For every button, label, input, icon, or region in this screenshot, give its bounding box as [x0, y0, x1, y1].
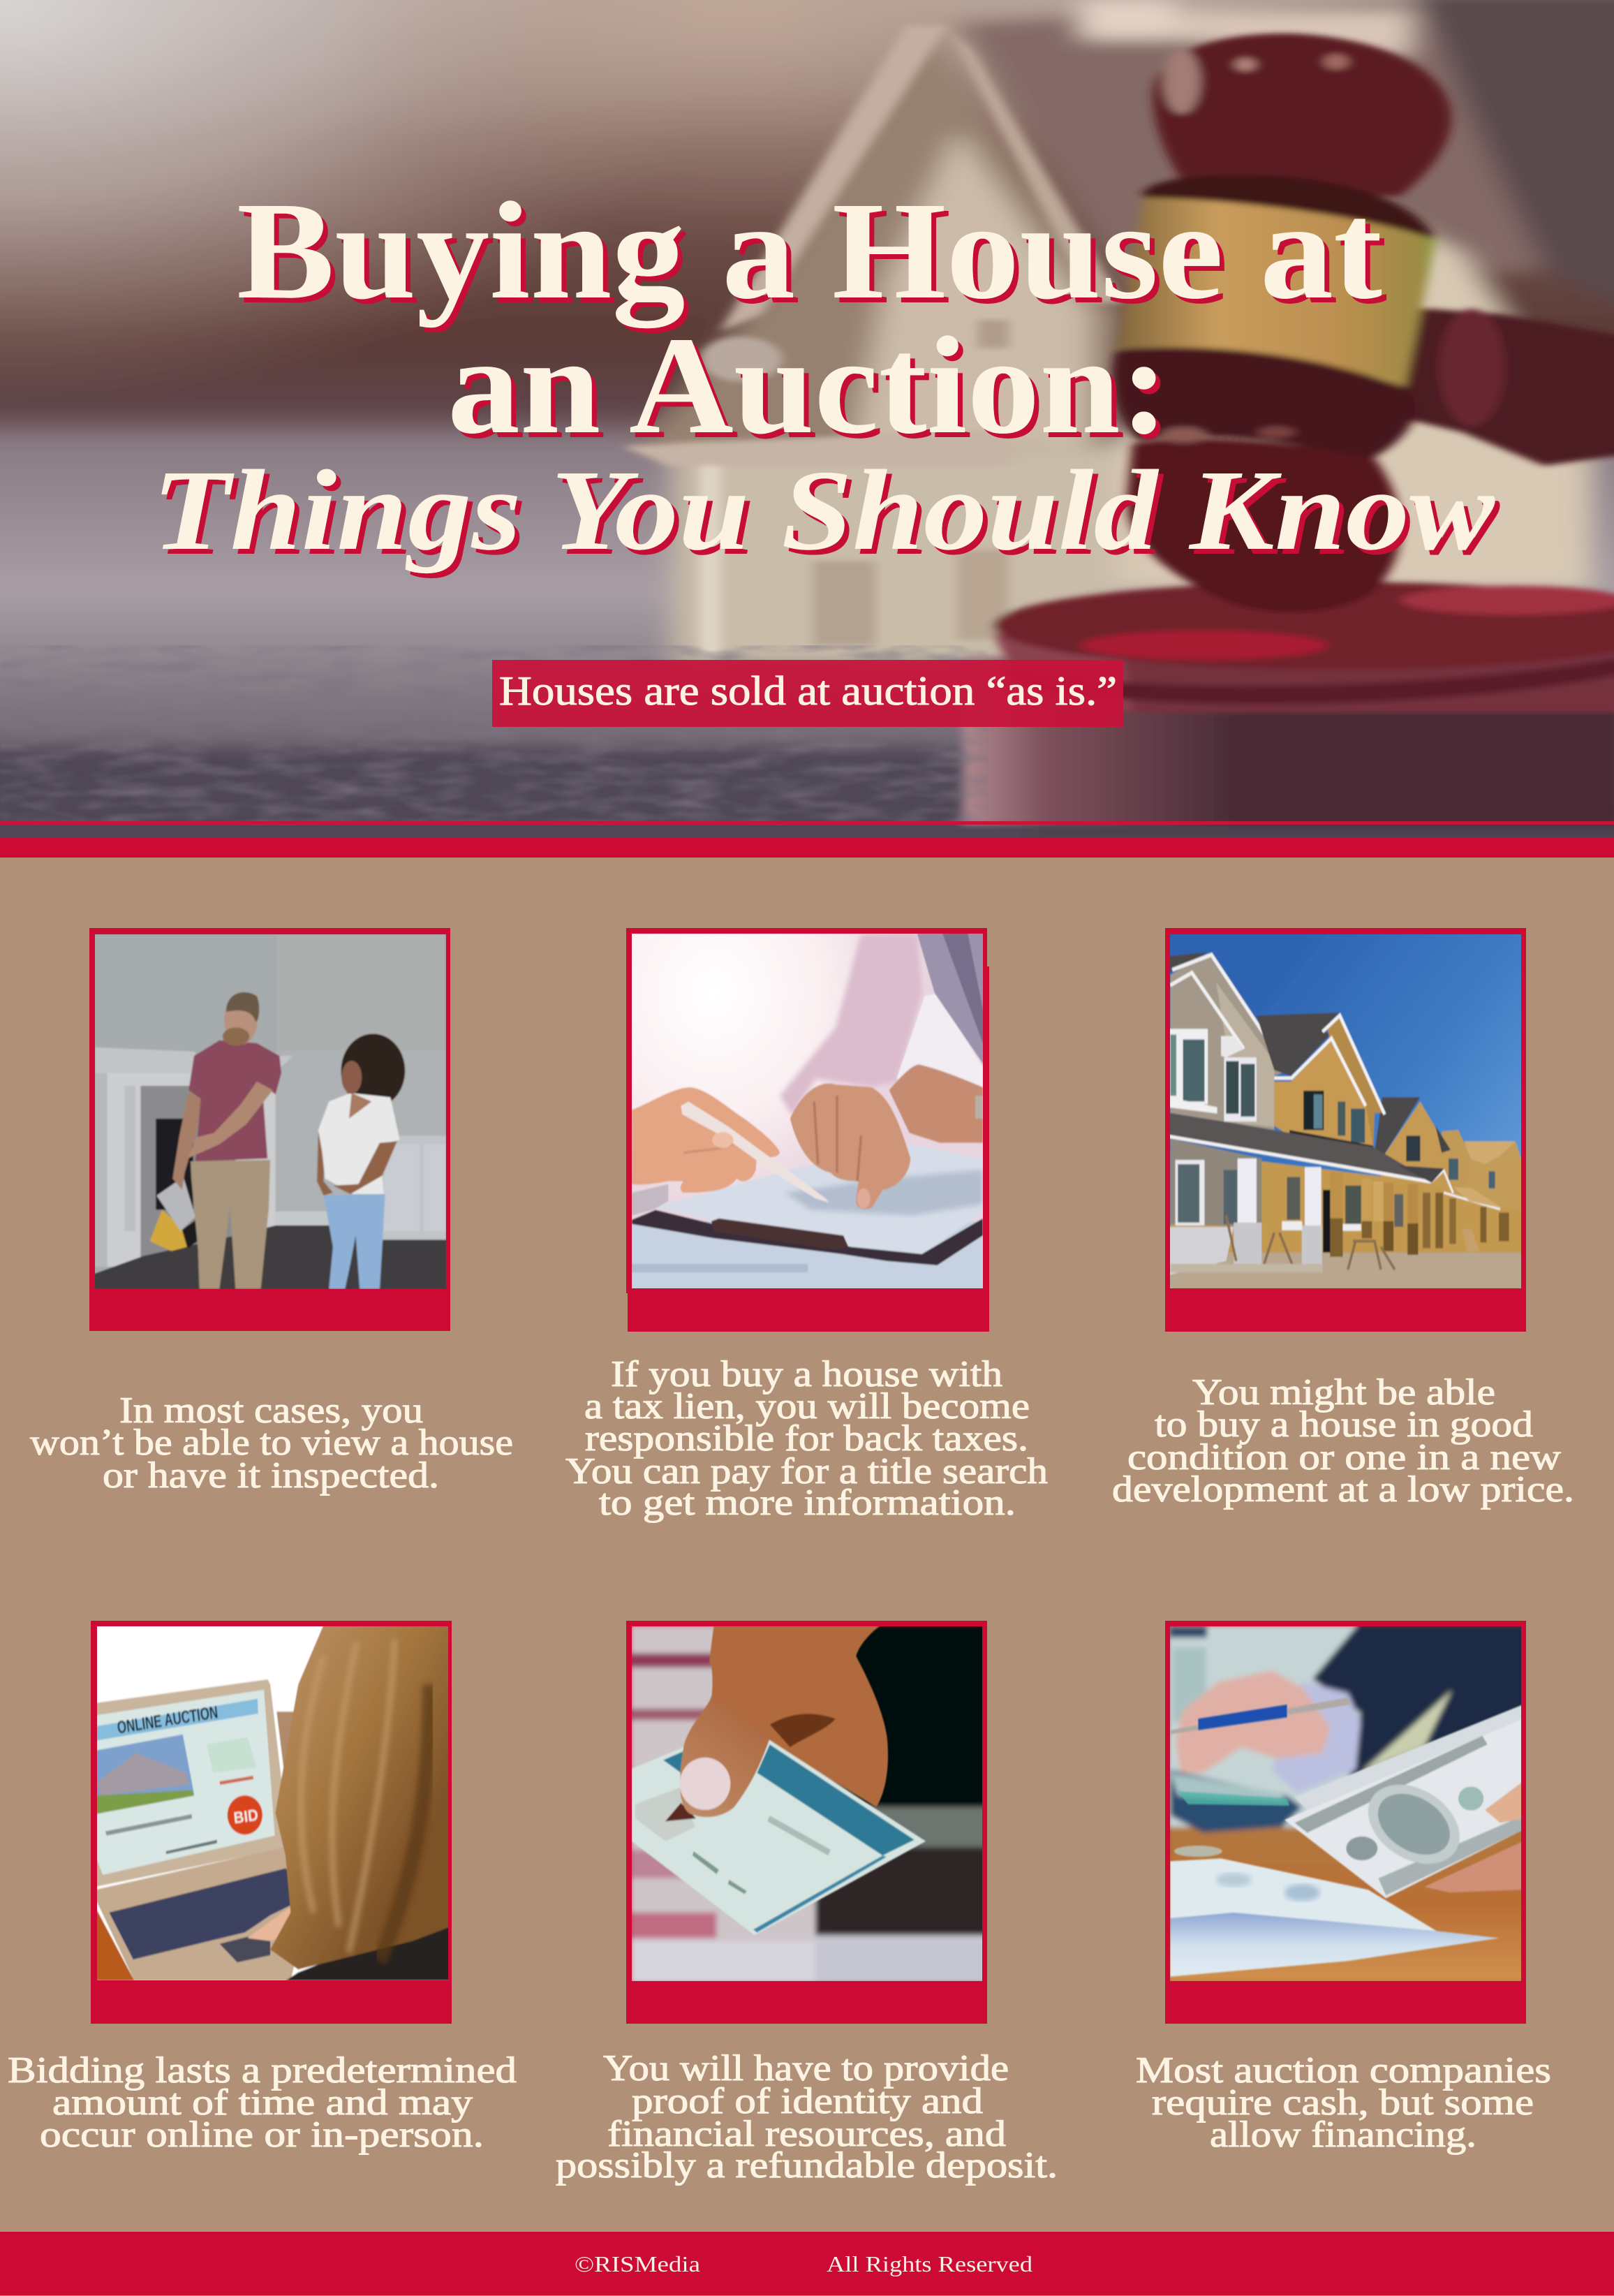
- photo: woman bidding on an online auction laptop: BID: [232, 1805, 259, 1827]
- caption: responsible for back taxes.: [585, 1418, 1028, 1459]
- caption: to get more information.: [599, 1482, 1016, 1523]
- red band: [0, 838, 1614, 858]
- caption: You can pay for a title search: [565, 1451, 1048, 1492]
- caption: development at a low price.: [1112, 1469, 1574, 1510]
- caption: allow financing.: [1210, 2114, 1476, 2155]
- photo: woman bidding on an online auction laptop: ONLINE AUCTION: [116, 1702, 219, 1738]
- photo frame: [91, 1621, 452, 2024]
- footer copyright: ©RISMedia: [575, 2251, 700, 2276]
- caption: [1112, 1372, 1574, 1510]
- caption: won’t be able to view a house: [30, 1422, 513, 1463]
- title: an Auction:: [447, 309, 1169, 463]
- caption: a tax lien, you will become: [584, 1386, 1030, 1427]
- caption: [556, 2048, 1058, 2186]
- caption: occur online or in-person.: [40, 2114, 484, 2155]
- panel: card 5, proof of identity: [556, 1621, 1058, 2186]
- caption: If you buy a house with: [611, 1354, 1002, 1394]
- subtitle badge: Houses are sold at auction “as is.”: [499, 668, 1117, 714]
- caption: [8, 2050, 517, 2155]
- panel: card 1, view or inspect: [30, 928, 513, 1496]
- caption: condition or one in a new: [1127, 1437, 1562, 1478]
- caption: to buy a house in good: [1155, 1404, 1533, 1445]
- caption: or have it inspected.: [103, 1455, 439, 1496]
- panel: hero header: [0, 0, 1614, 858]
- footer rights: All Rights Reserved: [827, 2251, 1032, 2276]
- title: Things You Should Know: [152, 446, 1495, 574]
- thin red line: [0, 821, 1614, 825]
- photo frame: [1165, 1621, 1526, 2024]
- photo: couple in empty room: [94, 934, 447, 1290]
- subtitle badge: [492, 660, 1123, 727]
- photo frame: [626, 928, 989, 1332]
- photo frame: [1165, 928, 1526, 1332]
- hero photo: gavel and model house: [0, 0, 1614, 853]
- caption: [565, 1354, 1048, 1523]
- photo: counting dollar bills beside a calculator: [1168, 1625, 1525, 1984]
- panel: card 4, bidding: [8, 1621, 517, 2155]
- caption: You will have to provide: [603, 2048, 1009, 2089]
- caption: possibly a refundable deposit.: [556, 2145, 1058, 2186]
- caption: [1136, 2050, 1551, 2155]
- photo: hands pointing at a document: [630, 933, 986, 1290]
- panel: card 2, tax lien: [565, 928, 1048, 1523]
- title: [152, 174, 1495, 574]
- caption: require cash, but some: [1152, 2082, 1534, 2123]
- panel: footer bar: [0, 2232, 1614, 2295]
- caption: financial resources, and: [607, 2114, 1006, 2154]
- caption: You might be able: [1192, 1372, 1495, 1413]
- photo: woman bidding on an online auction laptop: [93, 1625, 450, 1984]
- photo: hand holding an identity card: [630, 1625, 988, 1984]
- photo: row of new houses under construction: [1168, 933, 1523, 1290]
- panel: card 3, low price: [1112, 928, 1574, 1510]
- caption: Most auction companies: [1136, 2050, 1551, 2091]
- caption: In most cases, you: [119, 1390, 423, 1431]
- caption: [30, 1390, 513, 1496]
- caption: amount of time and may: [52, 2082, 473, 2123]
- panel: card 6, cash or financing: [1136, 1621, 1551, 2155]
- photo frame: [626, 1621, 987, 2024]
- caption: proof of identity and: [632, 2081, 983, 2121]
- title: Buying a House at: [237, 174, 1382, 328]
- photo frame: [89, 928, 450, 1331]
- caption: Bidding lasts a predetermined: [8, 2050, 517, 2091]
- table texture: [0, 645, 989, 825]
